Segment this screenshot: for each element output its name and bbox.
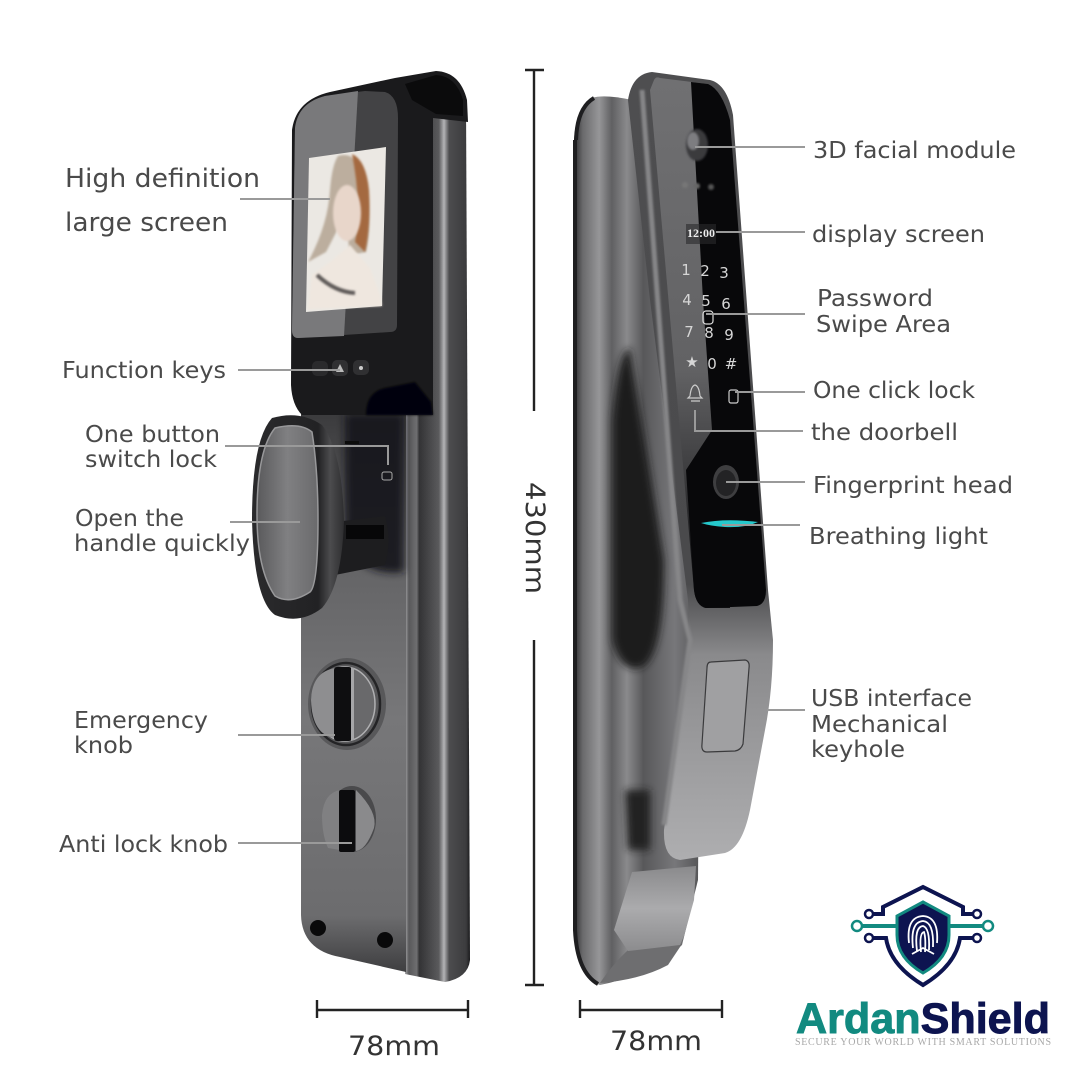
handle recess	[612, 348, 664, 668]
keypad: 0	[707, 355, 717, 373]
width dimension: right 78mm	[580, 1000, 722, 1057]
label: high definition large screen	[65, 164, 260, 238]
portrait body	[308, 245, 382, 309]
one click lock icon	[729, 390, 738, 403]
label: USB interface mechanical keyhole: keyhole	[811, 737, 905, 763]
glass front light reflection	[292, 91, 358, 338]
keypad: 1	[681, 261, 691, 279]
function buttons	[312, 360, 369, 376]
front panel	[628, 72, 773, 860]
label: emergency knob	[74, 708, 208, 759]
icon: fingerprint	[909, 916, 937, 954]
label: 3D facial module: 3D facial module	[813, 138, 1016, 164]
mechanical keyhole cover	[702, 660, 749, 752]
width dimension: left 78mm	[317, 1000, 468, 1062]
back plate dark edge	[575, 98, 598, 984]
portrait face	[333, 185, 361, 241]
plate shadow below head	[345, 413, 404, 573]
tagline: SECURE YOUR WORLD WITH SMART SOLUTIONS	[795, 1037, 1051, 1048]
right lock: front view	[574, 72, 773, 985]
label: password swipe area	[816, 286, 951, 338]
keypad: #	[725, 355, 737, 373]
keypad: 6	[721, 295, 731, 313]
label: password swipe area: Swipe Area	[816, 312, 951, 338]
foot of handle	[600, 866, 696, 983]
black glass panel	[686, 82, 766, 608]
label: USB interface mechanical keyhole: USB interface	[811, 686, 972, 712]
label: high definition large screen: High definition	[65, 164, 260, 194]
breathing light	[701, 520, 758, 527]
label: one button switch lock: One button	[85, 422, 220, 448]
back plate	[301, 410, 406, 972]
height dimension: 430mm	[519, 70, 550, 985]
label: emergency knob: knob	[74, 733, 133, 759]
display clock	[686, 224, 716, 244]
handle	[252, 415, 344, 619]
portrait display	[306, 147, 386, 312]
keypad: 5	[701, 292, 711, 310]
label: fingerprint head: Fingerprint head	[813, 473, 1013, 499]
head side streaks	[405, 75, 463, 116]
right labels	[809, 138, 1016, 763]
height dimension: 430mm: 430mm	[519, 482, 550, 594]
emergency knob	[308, 658, 386, 750]
label: anti lock knob: Anti lock knob	[59, 832, 228, 858]
label: one button switch lock: switch lock	[85, 447, 218, 473]
width dimension: left 78mm: 78mm	[348, 1031, 440, 1062]
wordmark: ArdanShield	[796, 995, 1050, 1043]
small lock icon	[382, 472, 392, 480]
width dimension: right 78mm: 78mm	[610, 1026, 702, 1057]
anti lock knob	[322, 786, 376, 852]
grey glass panel	[650, 77, 730, 608]
handle shaft	[335, 516, 388, 575]
speaker slot	[345, 441, 359, 444]
back plate	[574, 96, 700, 985]
portrait hair warm side	[352, 154, 370, 252]
label: the doorbell: the doorbell	[811, 420, 958, 446]
keypad: 7	[684, 323, 694, 341]
glass front dark side	[292, 91, 398, 338]
label: USB interface mechanical keyhole: Mechanical	[811, 712, 948, 738]
panel edge highlight	[642, 90, 690, 825]
fingerprint head	[713, 465, 739, 499]
label: emergency knob: Emergency	[74, 708, 208, 734]
head housing	[291, 71, 468, 415]
keypad: 3	[719, 264, 729, 282]
keypad: 8	[704, 324, 714, 342]
lower recess	[625, 790, 650, 850]
label: one click lock: One click lock	[813, 378, 976, 404]
portrait hair	[308, 155, 369, 262]
label: USB interface mechanical keyhole	[811, 686, 972, 763]
logo: ArdanShield	[795, 887, 1051, 1048]
label: high definition large screen: large screen	[65, 208, 228, 238]
swipe area icon	[703, 311, 713, 324]
label: one button switch lock	[85, 422, 220, 473]
label: display screen: display screen	[812, 222, 985, 248]
left labels	[59, 164, 260, 858]
portrait necklace	[317, 275, 355, 293]
label: breathing light: Breathing light	[809, 524, 988, 550]
keypad: 2	[700, 262, 710, 280]
keypad: ★	[685, 353, 699, 371]
label: open the handle quickly	[74, 506, 250, 557]
keypad	[681, 261, 737, 373]
rear rail	[405, 100, 470, 982]
screws	[310, 920, 326, 936]
display clock: 12:00	[687, 226, 715, 240]
doorbell icon	[688, 385, 702, 401]
icon: circuit shield	[852, 887, 993, 985]
head lip shadow	[366, 382, 433, 415]
label: open the handle quickly: handle quickly	[74, 531, 250, 557]
label: function keys: Function keys	[62, 358, 226, 384]
left lock: rear view	[252, 71, 470, 982]
3D facial module	[682, 129, 714, 190]
keypad: 9	[724, 326, 734, 344]
label: open the handle quickly: Open the	[75, 506, 184, 532]
label: password swipe area: Password	[817, 286, 933, 312]
callout lines	[225, 147, 805, 843]
keypad: 4	[682, 291, 692, 309]
